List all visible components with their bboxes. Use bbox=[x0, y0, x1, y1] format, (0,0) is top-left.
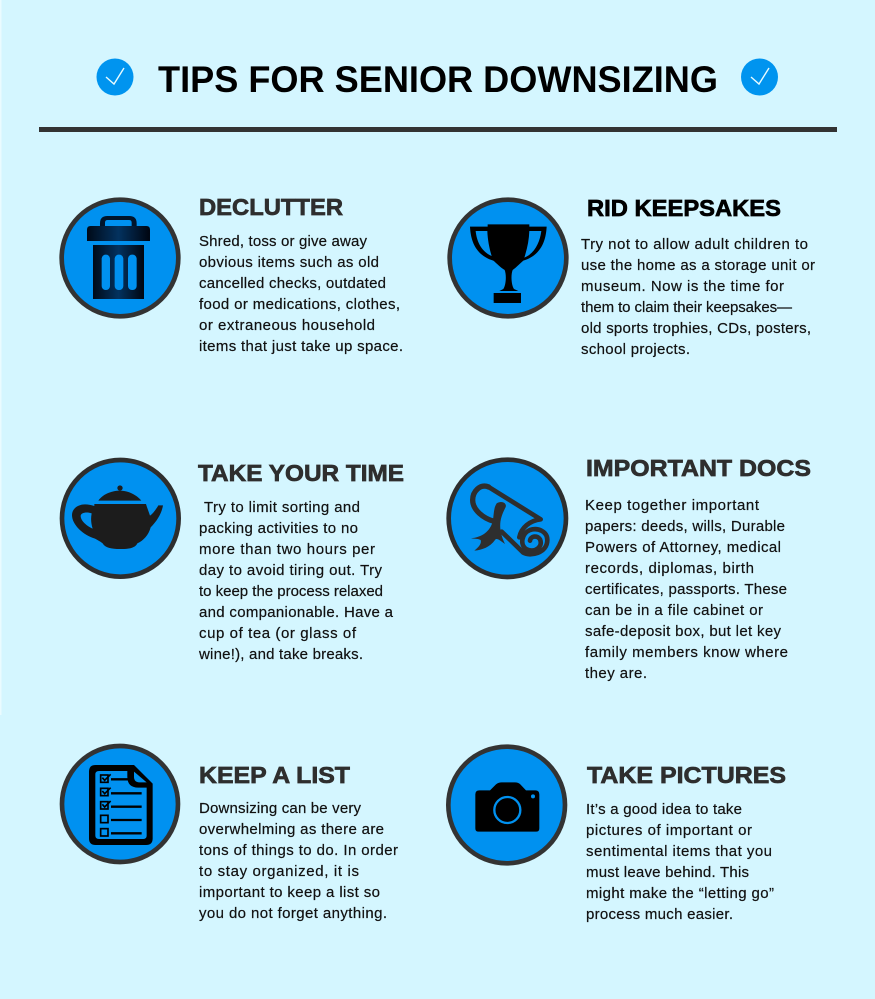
body text: cup of tea (or glass of bbox=[199, 625, 357, 642]
body text: tons of things to do. In order bbox=[199, 842, 398, 859]
body text: or extraneous household bbox=[199, 317, 375, 334]
body text bbox=[585, 497, 788, 682]
body text: more than two hours per bbox=[199, 541, 375, 558]
body text: process much easier. bbox=[586, 906, 733, 923]
heading: KEEP A LIST bbox=[199, 762, 351, 788]
panel: declutter bbox=[62, 194, 403, 355]
body text: museum. Now is the time for bbox=[581, 278, 784, 295]
icon: teapot bbox=[62, 460, 179, 577]
body text: important to keep a list so bbox=[199, 884, 380, 901]
body text: to stay organized, it is bbox=[199, 863, 359, 880]
body text: obvious items such as old bbox=[199, 254, 379, 271]
body text: use the home as a storage unit or bbox=[581, 257, 815, 274]
body text: wine!), and take breaks. bbox=[198, 646, 363, 663]
body text: records, diplomas, birth bbox=[585, 560, 754, 577]
body text bbox=[198, 499, 394, 663]
icon: checklist bbox=[62, 746, 178, 862]
body text: day to avoid tiring out. Try bbox=[199, 562, 382, 579]
body text: sentimental items that you bbox=[586, 843, 772, 860]
body text: food or medications, clothes, bbox=[199, 296, 400, 313]
heading: RID KEEPSAKES bbox=[587, 195, 781, 221]
panel: rid keepsakes bbox=[450, 195, 815, 358]
body text: they are. bbox=[585, 665, 647, 682]
body text: packing activities to no bbox=[199, 520, 358, 537]
body text bbox=[581, 236, 815, 358]
icon: camera bbox=[448, 747, 565, 863]
body text: Powers of Attorney, medical bbox=[585, 539, 781, 556]
header bbox=[39, 58, 837, 132]
body text bbox=[586, 801, 774, 923]
body text: might make the “letting go” bbox=[586, 885, 774, 902]
body text: and companionable. Have a bbox=[199, 604, 394, 621]
body text: safe-deposit box, but let key bbox=[585, 623, 782, 640]
body text: them to claim their keepsakes— bbox=[581, 299, 792, 316]
body text: Downsizing can be very bbox=[199, 800, 362, 817]
body text: family members know where bbox=[585, 644, 788, 661]
body text: certificates, passports. These bbox=[585, 581, 787, 598]
body text: Shred, toss or give away bbox=[199, 233, 368, 250]
body text: It’s a good idea to take bbox=[586, 801, 742, 818]
heading: IMPORTANT DOCS bbox=[586, 455, 811, 481]
body text: old sports trophies, CDs, posters, bbox=[581, 320, 811, 337]
body text: Try to limit sorting and bbox=[204, 499, 360, 516]
body text bbox=[199, 800, 398, 922]
icon: trophy bbox=[450, 200, 566, 316]
body text: overwhelming as there are bbox=[199, 821, 384, 838]
body text: cancelled checks, outdated bbox=[199, 275, 386, 292]
panel: take pictures bbox=[448, 747, 786, 923]
icon: scroll bbox=[449, 460, 566, 577]
heading: DECLUTTER bbox=[199, 194, 343, 220]
icon: trash can bbox=[62, 200, 178, 316]
body text: pictures of important or bbox=[586, 822, 752, 839]
panel: important docs bbox=[449, 455, 811, 682]
body text bbox=[199, 233, 403, 355]
body text: must leave behind. This bbox=[586, 864, 749, 881]
title: TIPS FOR SENIOR DOWNSIZING bbox=[158, 59, 718, 100]
panel: keep a list bbox=[62, 746, 398, 922]
icon: right check badge bbox=[741, 58, 778, 96]
body text: can be in a file cabinet or bbox=[585, 602, 763, 619]
body text: school projects. bbox=[581, 341, 690, 358]
icon: left check badge bbox=[96, 58, 134, 96]
body text: Try not to allow adult children to bbox=[581, 236, 808, 253]
body text: Keep together important bbox=[585, 497, 760, 514]
body text: items that just take up space. bbox=[199, 338, 403, 355]
header rule bbox=[39, 127, 837, 132]
heading: TAKE PICTURES bbox=[587, 762, 786, 788]
body text: to keep the process relaxed bbox=[199, 583, 383, 600]
body text: papers: deeds, wills, Durable bbox=[585, 518, 785, 535]
panel: take your time bbox=[62, 460, 404, 663]
heading: TAKE YOUR TIME bbox=[198, 460, 404, 486]
body text: you do not forget anything. bbox=[199, 905, 387, 922]
